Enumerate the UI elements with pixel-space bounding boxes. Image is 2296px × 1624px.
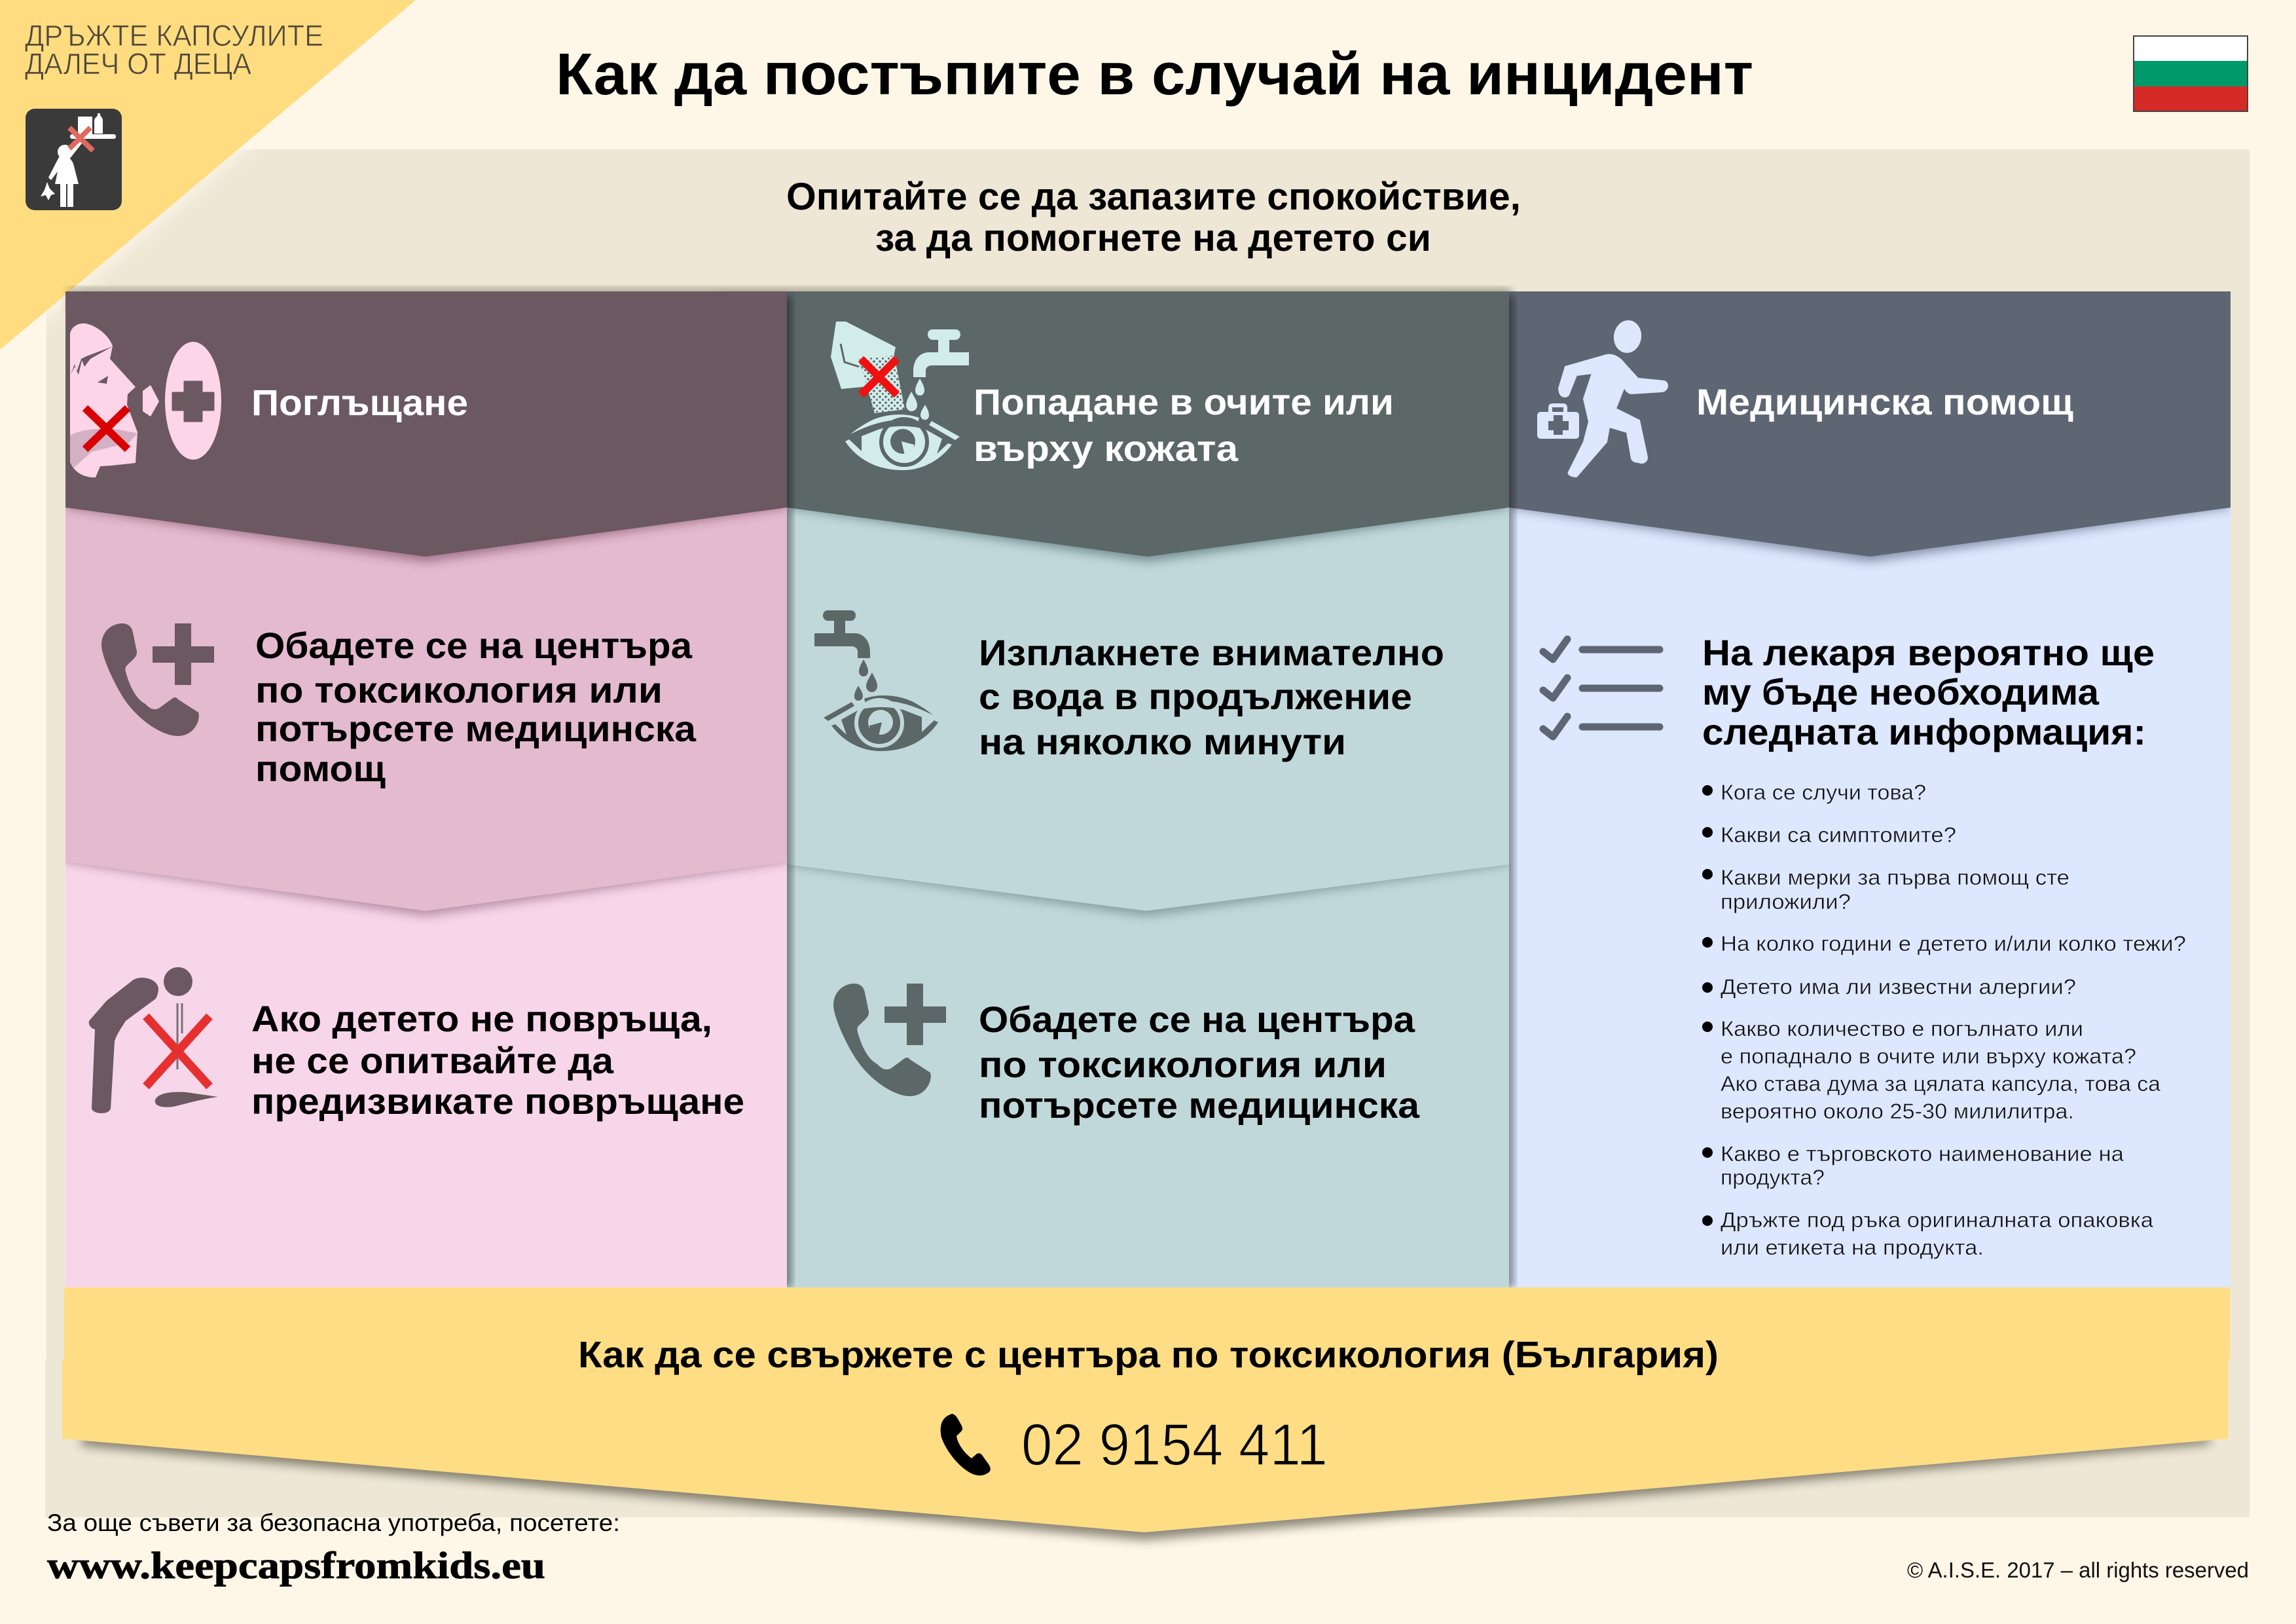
heading: medical help: Медицинска помощ — [1696, 381, 2073, 422]
text: call toxicology centre, eye and skin — [979, 999, 1420, 1126]
title: Как да постъпите в случай на инцидент — [556, 42, 1753, 107]
panel: ingestion column — [65, 291, 787, 1287]
text: information the doctor needs: му бъде необходима — [1702, 671, 2100, 712]
icon: person running with first aid kit — [1537, 318, 1667, 477]
shadow of rinsing column — [1440, 296, 1514, 1287]
header band: eye and skin — [787, 291, 1509, 557]
bullet list: questions — [1702, 781, 2186, 1259]
phone number: 02 9154 411 — [1021, 1412, 1328, 1478]
text: information the doctor needs — [1702, 632, 2155, 752]
footer: copyright: © A.I.S.E. 2017 – all rights reserved — [1907, 1558, 2249, 1582]
bullet list: questions: Детето има ли известни алергии? — [1721, 975, 2076, 999]
subtitle — [786, 175, 1521, 259]
footer: website: www.keepcapsfromkids.eu — [47, 1544, 545, 1587]
icon: do not induce vomiting — [89, 967, 218, 1113]
text: call toxicology centre, eye and skin: потърсете медицинска — [979, 1084, 1420, 1126]
icon: phone — [941, 1414, 991, 1475]
heading: ingestion: Поглъщане — [251, 382, 468, 423]
corner warning text: ДРЪЖТЕ КАПСУЛИТЕ — [25, 19, 323, 52]
subtitle: за да помогнете на детето си — [875, 217, 1431, 259]
icon: phone plus, eye and skin — [833, 984, 946, 1096]
header band: medical help — [1509, 291, 2231, 557]
text: information the doctor needs: следната информация: — [1702, 711, 2146, 752]
text: call toxicology centre, ingestion: потърсете медицинска — [255, 708, 697, 749]
bullet list: questions: продукта? — [1721, 1166, 1825, 1189]
bullet list: questions: Кога се случи това? — [1721, 781, 1926, 804]
bullet list: questions: или етикета на продукта. — [1721, 1236, 1984, 1259]
text: do not induce vomiting: Ако детето не повръща, — [251, 998, 712, 1039]
bullet list: questions: е попаднало в очите или върху кожата? — [1721, 1044, 2136, 1068]
panel: contact banner — [62, 1287, 2230, 1540]
bullet list: questions: Какви мерки за първа помощ сте — [1721, 866, 2069, 889]
panel: medical help column — [1509, 291, 2231, 1287]
top edge shadow above columns — [68, 287, 1511, 313]
subtitle: Опитайте се да запазите спокойствие, — [786, 175, 1521, 218]
heading: eye and skin — [974, 381, 1394, 469]
text: rinse with water: на няколко минути — [979, 721, 1346, 762]
bullet list: questions: На колко години е детето и/или колко тежи? — [1721, 932, 2186, 955]
icon: checklist — [1543, 639, 1660, 737]
text: rinse with water: Изплакнете внимателно — [979, 632, 1444, 673]
icon: tap and eye — [814, 610, 938, 751]
bullet list: questions: Дръжте под ръка оригиналната опаковка — [1721, 1208, 2153, 1232]
heading: eye and skin: Попадане в очите или — [974, 381, 1394, 422]
text: rinse with water: с вода в продължение — [979, 676, 1412, 717]
text: rinse with water — [979, 632, 1444, 762]
banner heading: Как да се свържете с центъра по токсикология (България) — [578, 1334, 1719, 1376]
text: call toxicology centre, ingestion — [255, 625, 697, 789]
bullet list: questions: Какво е търговското наименование на — [1721, 1142, 2124, 1166]
corner banner with warning — [0, 0, 422, 359]
text: call toxicology centre, eye and skin: по токсикология или — [979, 1044, 1387, 1085]
bullet list: questions: Какво количество е погълнато или — [1721, 1017, 2083, 1041]
text: call toxicology centre, ingestion: по токсикология или — [255, 669, 663, 710]
text: call toxicology centre, ingestion: помощ — [255, 748, 386, 789]
panel: eye and skin column — [787, 291, 1509, 1287]
text: do not induce vomiting: не се опитвайте да — [251, 1040, 614, 1081]
text: do not induce vomiting — [251, 998, 744, 1122]
bullet list: questions: Какви са симптомите? — [1721, 823, 1956, 847]
footer: safe use note: За още съвети за безопасна употреба, посетете: — [47, 1509, 620, 1536]
bullet list: questions: вероятно около 25-30 милилитра. — [1721, 1099, 2074, 1123]
text: call toxicology centre, eye and skin: Обадете се на центъра — [979, 999, 1415, 1040]
corner warning text: ДАЛЕЧ ОТ ДЕЦА — [25, 47, 251, 81]
header band: ingestion — [65, 291, 787, 557]
icon: capsule splash and eye — [831, 322, 969, 470]
icon: Bulgarian flag — [2134, 36, 2248, 111]
text: call toxicology centre, ingestion: Обадете се на центъра — [255, 625, 693, 666]
corner warning text — [25, 19, 323, 81]
icon: phone plus, ingestion — [101, 623, 214, 736]
heading: eye and skin: върху кожата — [974, 428, 1239, 469]
bullet list: questions: приложили? — [1721, 890, 1851, 913]
icon: keep capsules away from children — [26, 109, 122, 210]
shadow of ingestion column — [720, 296, 792, 1287]
icon: ingestion head — [70, 323, 221, 477]
tier: call toxicology — [65, 291, 787, 911]
text: information the doctor needs: На лекаря вероятно ще — [1702, 632, 2155, 673]
bullet list: questions: Ако става дума за цялата капсула, това са — [1721, 1072, 2160, 1096]
text: do not induce vomiting: предизвикате повръщане — [251, 1080, 744, 1122]
